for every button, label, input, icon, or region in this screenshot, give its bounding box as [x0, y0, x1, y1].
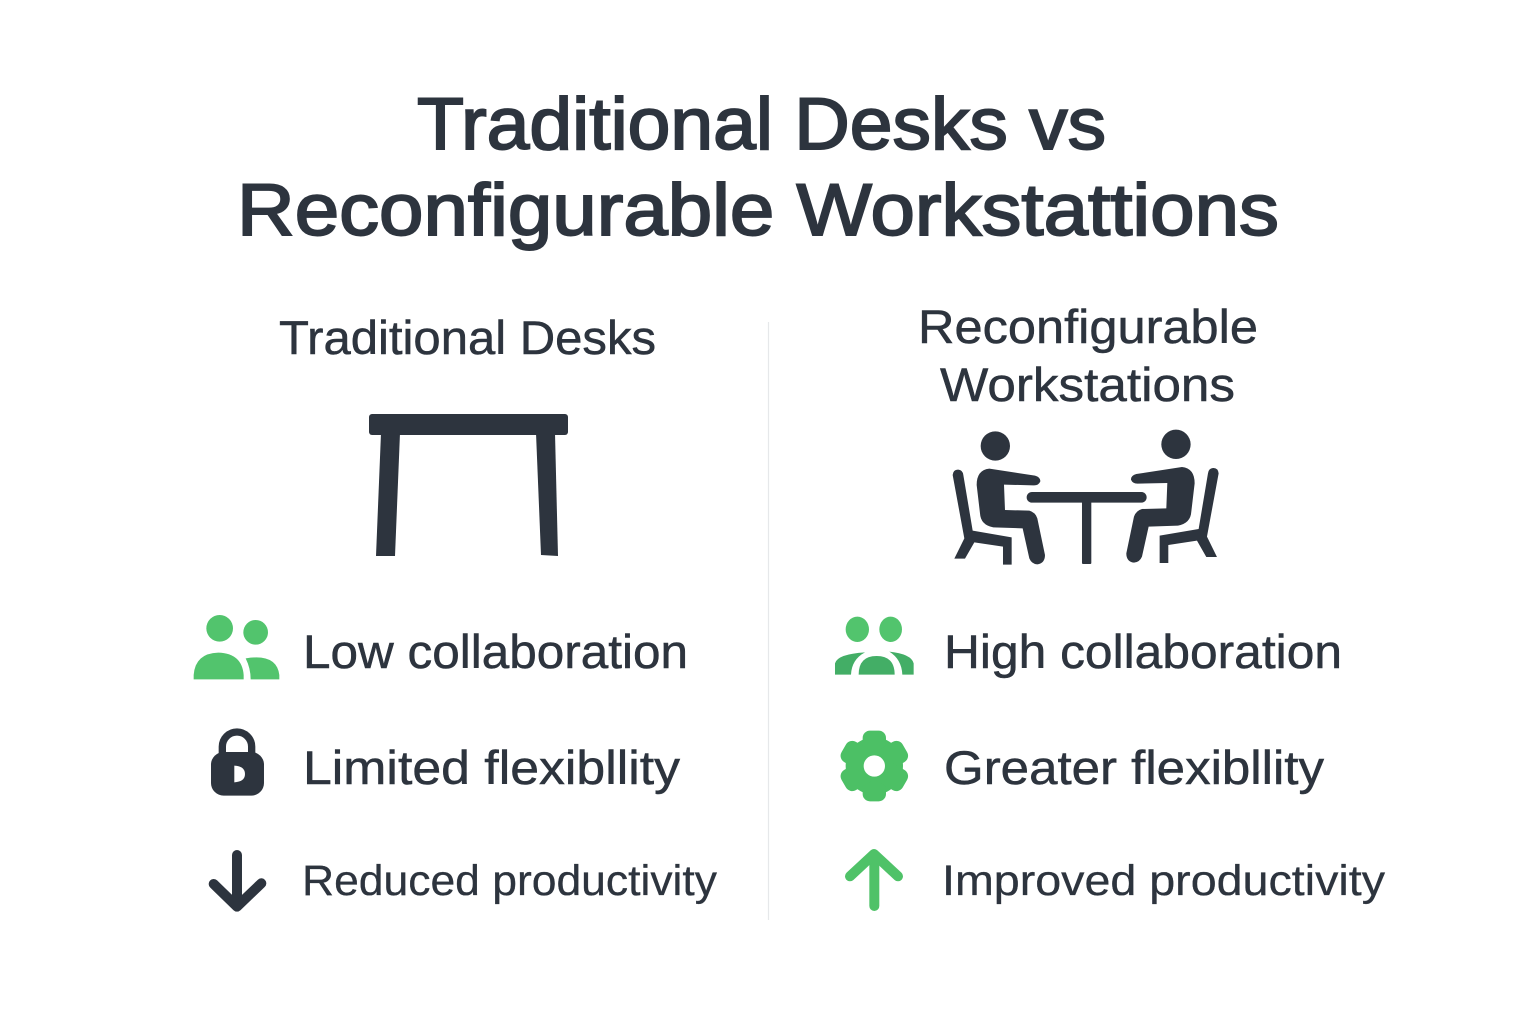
icon: gear [838, 731, 911, 801]
icon: padlock [211, 732, 264, 796]
heading: reconfigurable workstations [918, 300, 1258, 411]
title: Traditional Desks vs [417, 84, 1106, 165]
label: limited flexibility: Limited flexibllity [303, 741, 681, 794]
label: reduced productivity: Reduced productivity [302, 857, 718, 905]
icon: down arrow [214, 855, 261, 907]
label: low collaboration: Low collaboration [303, 625, 688, 678]
icon: two people, low collaboration [194, 615, 279, 679]
label: high collaboration: High collaboration [944, 625, 1342, 678]
panel: reconfigurable workstations [835, 300, 1386, 906]
title: Reconfigurable Workstattions [237, 170, 1279, 251]
heading: reconfigurable workstations: Reconfigurable [918, 300, 1258, 353]
heading: reconfigurable workstations: Workstations [940, 358, 1235, 411]
icon: up arrow [850, 854, 898, 906]
label: improved productivity: Improved productivity [942, 857, 1386, 905]
heading: traditional desks: Traditional Desks [279, 311, 656, 364]
icon: desk [369, 414, 568, 556]
panel: traditional desks [194, 311, 718, 907]
icon: people together, high collaboration [835, 617, 914, 675]
icon: two people at a table [953, 430, 1219, 565]
title [237, 84, 1279, 251]
label: greater flexibility: Greater flexibllity [944, 741, 1325, 794]
